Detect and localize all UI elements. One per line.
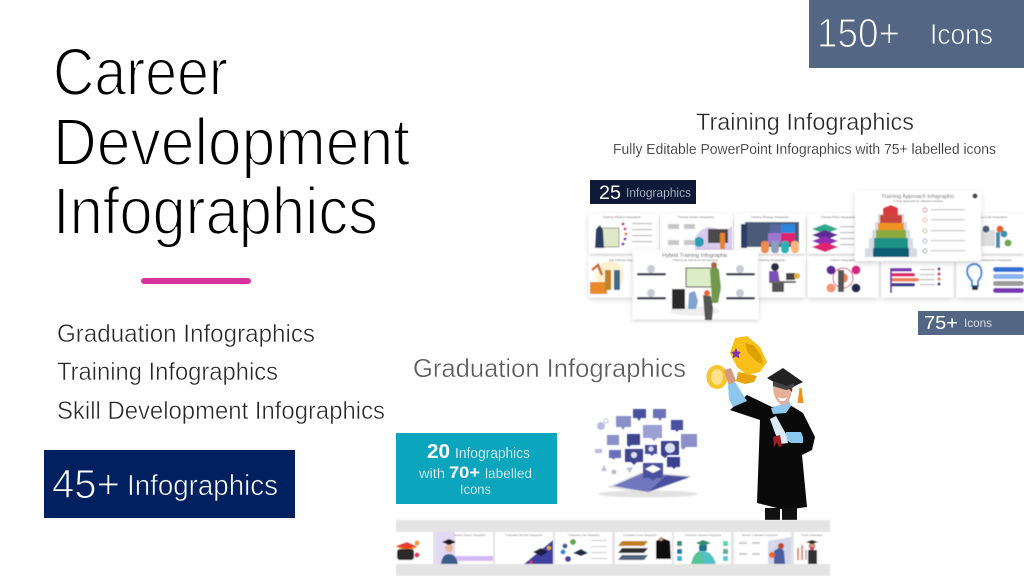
diploma (770, 416, 788, 447)
badge: 20 infographics: labelled (485, 465, 532, 481)
badge: 75+ icons: 75+ (924, 313, 958, 333)
badge: 20 infographics: 70+ (449, 463, 480, 482)
gown (730, 395, 815, 510)
thumbnail: women graduation: Women Graduation Infographic (742, 533, 779, 537)
badge: 20 infographics (396, 433, 557, 504)
thumbnail: trainee (808, 257, 878, 297)
badge: 20 infographics: Infographics (455, 445, 530, 462)
topic list: Training Infographics (57, 358, 278, 386)
trophy (711, 336, 767, 385)
floating icon bubbles (595, 409, 697, 481)
thumbnail: student profile: Student Degree Infographic (454, 533, 487, 537)
thumbnail: women graduation (734, 532, 791, 564)
thumbnail: timely graduation: Timely Graduation (801, 533, 823, 537)
lower cuff (786, 432, 803, 443)
badge: 150+ icons (809, 0, 1024, 68)
thumbnail: training wisdom (589, 214, 658, 253)
featured thumbnail: training approach pyramid (855, 191, 981, 261)
heading: training infographics: Fully Editable PowerPoint Infographics with 75+ labelled icons (613, 141, 996, 158)
thumbnail: timely graduation (794, 532, 830, 564)
badge: 20 infographics: with (418, 465, 445, 481)
thumbnail: technical training (735, 257, 805, 297)
badge: 150+ icons: 150+ (817, 10, 900, 56)
icon cluster: tablet with floating icons (595, 409, 698, 498)
thumbnail: job training (589, 257, 658, 297)
topic list: Graduation Infographics (57, 320, 315, 348)
thumbnail: training strategy: Training Strategy Infographic (751, 215, 790, 219)
thumbnail: training design: Training Design Infographic (678, 215, 715, 219)
face (773, 378, 792, 406)
training thumbnails grid (589, 191, 1024, 320)
collar (771, 400, 791, 414)
title (53, 35, 410, 249)
pink accent line (141, 278, 251, 284)
thumbnail: training design (661, 214, 732, 253)
gray strip: graduation thumbnails (396, 520, 830, 576)
heading: training infographics (613, 109, 996, 158)
thumbnail: graduation gown: Graduation Gown Infographic (623, 533, 658, 537)
illustration: graduate holding trophy (706, 336, 815, 520)
raised arm and cuff (724, 368, 747, 407)
featured thumbnail: training approach pyramid: Training Approach Infographic (881, 194, 955, 200)
thumbnail: student profile (435, 532, 493, 564)
thumbnail: graduation benefits: Graduation Benefits Infographic (506, 533, 543, 537)
thumbnail: training policy (808, 214, 878, 253)
badge: 20 infographics: 20 (427, 441, 450, 463)
thumbnail: graduation success: Graduation Success Infographic (685, 533, 722, 537)
thumbnail: skill development bulb (957, 257, 1024, 297)
badge: 75+ icons: Icons (964, 316, 992, 330)
thumbnail: training cycle (882, 214, 1024, 253)
thumbnail: training cycle: Training Cycle Infographic (973, 215, 1008, 219)
thumbnail: graduation benefits (495, 532, 553, 564)
thumbnail: graduation success (674, 532, 731, 564)
badge: 45+ infographics: Infographics (127, 470, 278, 502)
thumbnail: graduation cap (396, 532, 433, 564)
trophy handle (706, 365, 728, 389)
badge: 20 infographics: Icons (460, 481, 491, 497)
thumbnail: job training: Job Training Infographic (609, 258, 642, 262)
title: Infographics (53, 174, 378, 249)
featured thumbnail: hybrid training (633, 250, 758, 320)
thumbnail: graduation cap network (555, 532, 612, 564)
badge: 150+ icons: Icons (930, 19, 993, 51)
thumbnail: graduation gown (615, 532, 672, 564)
badge: 75+ icons (918, 311, 1024, 335)
featured thumbnail: hybrid training: Hybrid Training Infographic (662, 253, 728, 259)
thumbnail: trainee: Trainee Infographic (830, 258, 856, 262)
badge: 45+ infographics: 45+ (52, 461, 120, 507)
thumbnail: training strategy (735, 214, 805, 253)
heading: graduation infographics: Graduation Infographics (413, 353, 686, 383)
tablet (608, 472, 691, 493)
thumbnail: ladder bars (882, 257, 953, 297)
topic list (57, 320, 385, 425)
title: Development (53, 105, 410, 180)
thumbnail: graduation cap network: Graduation Cap Infographic (568, 533, 601, 537)
badge: 25 infographics (590, 180, 696, 204)
topic list: Skill Development Infographics (57, 397, 385, 425)
mortarboard (767, 368, 804, 403)
badge: 45+ infographics (44, 450, 295, 518)
thumbnail: training wisdom: Training Wisdom Infographic (603, 215, 642, 219)
trousers (765, 508, 797, 520)
badge: 25 infographics: 25 (599, 183, 621, 204)
badge: 25 infographics: Infographics (626, 185, 691, 200)
featured thumbnail: training approach pyramid: 5 Step approach for effective training (894, 199, 943, 203)
heading: training infographics: Training Infographics (696, 109, 914, 136)
featured thumbnail: hybrid training: Training as well as on job learning (672, 258, 718, 262)
thumbnail: technical training: Training Infographic (759, 258, 786, 262)
thumbnail: skill development bulb: Development Infographic (978, 258, 1012, 262)
thumbnail: training policy: Training Policy Infographic (820, 215, 856, 219)
tablet shadow (598, 490, 698, 498)
title: Career (53, 35, 228, 110)
